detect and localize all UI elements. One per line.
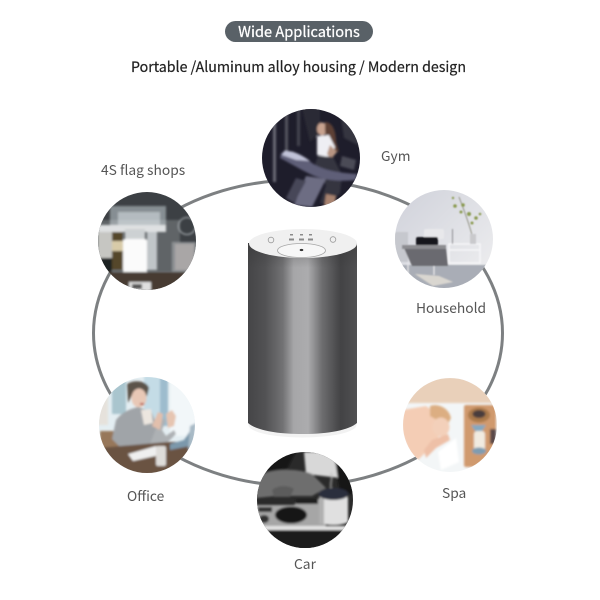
photo: gym: [260, 108, 364, 210]
photo: spa: [402, 377, 498, 473]
diffuser body: [248, 243, 357, 434]
label: gym: Gym: [381, 145, 410, 165]
side icons: [268, 237, 274, 243]
label: 4S flag shops: 4S flag shops: [101, 159, 185, 179]
product: aluminum diffuser: [248, 229, 357, 438]
label: car: Car: [294, 553, 317, 573]
photo: 4S flag shop: [96, 190, 198, 292]
photo: car: [256, 451, 354, 550]
photo: office: [98, 376, 198, 476]
diffuser base rim: [248, 412, 356, 438]
title pill: Wide Applications: [238, 21, 360, 42]
central button: [278, 244, 326, 258]
label: household: Household: [416, 297, 486, 317]
diffuser top panel: [249, 229, 357, 258]
label: office: Office: [127, 485, 165, 505]
indicator lights: [289, 234, 313, 240]
photo: household: [394, 189, 494, 290]
label: spa: Spa: [442, 482, 466, 502]
ring connecting the scenes: [94, 180, 502, 486]
subtitle: Portable /Aluminum alloy housing / Modern design: [131, 56, 466, 77]
